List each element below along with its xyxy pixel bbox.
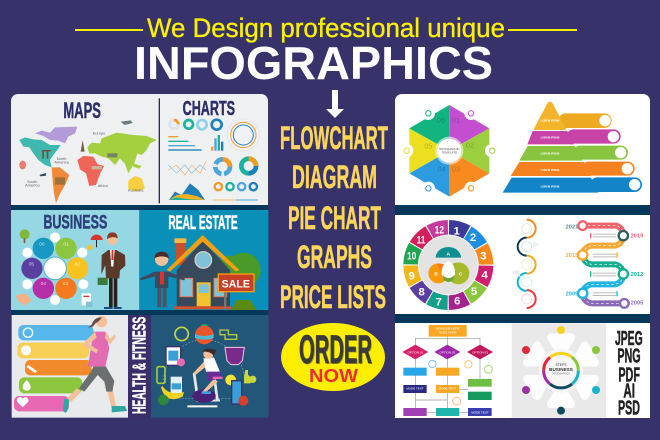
flowchart: MODE TEXT	[439, 387, 456, 391]
numbered wheel chart: 10	[407, 251, 416, 263]
numbered wheel chart: 5	[471, 286, 477, 298]
icon: handshake	[16, 293, 32, 306]
hexagon diagram: 05	[424, 141, 432, 150]
file format list	[615, 328, 643, 419]
tiers: LOREM IPSUM	[541, 152, 560, 156]
hexagon diagram	[400, 105, 498, 197]
pyramid chart	[503, 102, 642, 193]
hexagon diagram: 04	[438, 165, 446, 174]
badge: order now	[281, 323, 385, 391]
world map: Europe	[93, 130, 106, 135]
year labels	[566, 225, 643, 306]
tiers: LOREM IPSUM	[541, 168, 560, 172]
road timeline	[566, 221, 643, 308]
tiers: LOREM IPSUM	[541, 184, 560, 188]
six-step circular diagram	[512, 323, 606, 418]
world map: South	[27, 179, 38, 184]
world map	[19, 120, 157, 203]
venn diagram: A	[447, 252, 451, 258]
year labels: 2005	[631, 300, 643, 306]
list: infographic types: FLOWCHART	[280, 120, 388, 156]
list: infographic types: DIAGRAM	[292, 159, 377, 195]
flowchart: GOES HERE	[439, 331, 457, 335]
circular process diagram: 01	[63, 242, 69, 247]
figure: estate agent	[140, 252, 185, 307]
world map: North	[57, 156, 67, 161]
small rings	[213, 183, 258, 200]
flowchart: MODE TEXT	[471, 410, 489, 414]
panel: left portfolio collage	[11, 94, 268, 418]
world map: America	[25, 183, 40, 188]
badge: order now: ORDER	[299, 328, 372, 372]
year labels: 2021	[566, 225, 578, 231]
numbered wheel chart: 9	[409, 270, 415, 282]
hexagon diagram: 06	[437, 116, 445, 125]
icon: umbrella	[87, 235, 103, 250]
flowchart: OPTION 01	[408, 350, 423, 354]
circular process diagram: 06	[39, 242, 45, 247]
title: INFOGRAPHICS: INFOGRAPHICS	[134, 37, 493, 89]
bush	[217, 253, 261, 310]
vertical title: HEALTH & FITNESS	[129, 317, 150, 414]
file format list: AI	[623, 381, 635, 403]
flowchart: HEADLINE HERE	[436, 327, 460, 331]
circular process diagram	[21, 232, 88, 305]
six-step circular diagram: INFOGRAPHICS	[552, 372, 570, 375]
numbered wheel chart	[397, 213, 500, 317]
flowchart: MODE TEXT	[406, 387, 424, 391]
heading: We Design professional unique: We Design professional unique	[147, 13, 505, 43]
tiers: LOREM IPSUM	[541, 136, 560, 140]
hexagon diagram: TEMPLATE	[442, 151, 457, 155]
year labels: 2009	[566, 291, 578, 297]
numbered wheel chart: 4	[482, 270, 489, 282]
year labels: 2012	[631, 272, 643, 278]
file format list: PDF	[618, 365, 640, 387]
figure: cyclist on exercise bike	[187, 349, 223, 407]
panel: business	[11, 210, 139, 310]
infographic ribbons	[14, 325, 93, 411]
icon: plant	[20, 229, 30, 243]
world map: America	[54, 160, 70, 165]
health icons	[157, 324, 256, 406]
numbered wheel chart: 1	[454, 225, 460, 237]
panel: maps	[19, 98, 160, 203]
badge: order now: NOW	[309, 366, 358, 386]
list: infographic types	[280, 120, 388, 315]
numbered wheel chart: 7	[436, 296, 442, 308]
flowchart: OPTION 03	[472, 350, 488, 354]
heading: business: BUSINESS	[43, 212, 107, 233]
icon: report sheet	[82, 293, 93, 307]
panel: charts	[168, 98, 259, 200]
tiers	[503, 102, 598, 193]
area chart	[169, 183, 205, 200]
circular process diagram: 04	[41, 281, 46, 286]
heading: charts: CHARTS	[183, 98, 235, 120]
donut row	[170, 120, 222, 130]
list: infographic types: PIE CHART	[288, 200, 381, 236]
circular process diagram: 03	[63, 281, 68, 286]
numbered wheel chart: 3	[480, 250, 486, 262]
bars and line chart	[168, 135, 223, 175]
six-step circular diagram: STEPS	[556, 363, 567, 367]
badge: order now: ORDER	[300, 329, 373, 373]
circular process diagram: 05	[29, 262, 34, 267]
numbered wheel chart: 12	[435, 224, 444, 236]
sign: sale: SALE	[222, 278, 250, 290]
six-step circular diagram: BUSINESS	[549, 367, 573, 372]
panel: health and fitness	[12, 315, 268, 418]
hexagon diagram: 01	[452, 116, 460, 125]
numbered wheel chart: 6	[454, 295, 460, 307]
venn diagram	[428, 247, 469, 284]
circular process diagram: 02	[75, 262, 80, 267]
pie charts	[215, 159, 256, 174]
world map: Africa	[98, 183, 109, 188]
numbered wheel chart: 8	[419, 286, 425, 298]
icon: down arrow	[326, 90, 344, 118]
radial chart	[227, 119, 259, 151]
hexagon diagram: 03	[452, 165, 460, 174]
numbered wheel chart: 11	[417, 235, 425, 247]
flowchart: OPTION 02	[440, 350, 455, 354]
divider	[159, 98, 160, 203]
heading: real estate: REAL ESTATE	[168, 213, 238, 234]
venn diagram: B	[434, 272, 438, 278]
file format list: PSD	[618, 397, 640, 419]
vertical arc timeline	[511, 220, 540, 308]
numbered wheel chart: 2	[470, 232, 476, 244]
year labels: 2015	[566, 253, 578, 259]
heading: maps: MAPS	[63, 98, 101, 123]
venn diagram: C	[459, 272, 463, 278]
house	[167, 235, 239, 309]
ribbons	[558, 113, 642, 192]
file format list: PNG	[617, 346, 641, 368]
tiers: LOREM IPSUM	[541, 119, 560, 123]
panel: real estate	[139, 210, 268, 310]
list: infographic types: PRICE LISTS	[280, 279, 386, 315]
world map: Australia	[128, 187, 144, 192]
figure: businessman	[98, 232, 125, 309]
flowchart	[402, 325, 493, 416]
hexagon diagram: INFOGRAPHIC	[439, 147, 461, 151]
hexagon diagram: 02	[466, 140, 474, 149]
year labels: 2019	[631, 234, 643, 240]
list: infographic types: GRAPHS	[297, 239, 372, 275]
panel: right portfolio collage	[395, 94, 650, 419]
figure: runner	[63, 316, 127, 413]
